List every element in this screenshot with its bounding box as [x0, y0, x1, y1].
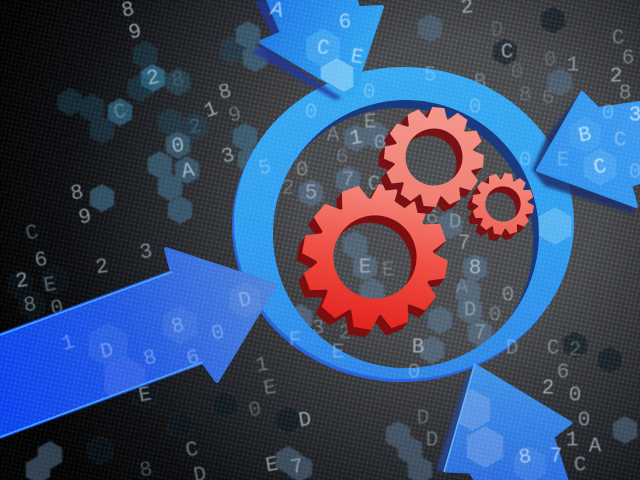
background hex characters: E [137, 384, 153, 408]
background hex characters: 2 [145, 66, 162, 92]
arrow: large from lower left: D [236, 288, 254, 314]
background hex characters: C [112, 100, 129, 126]
arrow: large from lower left: 8 [169, 314, 187, 340]
ring: blue target circle: F [289, 330, 301, 353]
background hex characters: 0 [247, 399, 263, 423]
background hex characters: C [547, 338, 559, 361]
background hex characters: 1 [566, 430, 578, 453]
arrow: right: C [614, 130, 626, 153]
background hex characters: 7 [342, 170, 354, 193]
background hex characters: E [364, 112, 376, 135]
arrow: bottom: 8 [517, 446, 533, 470]
background hex characters: 0 [502, 285, 514, 308]
background hex characters: E [262, 377, 278, 401]
background hex characters: C [368, 174, 380, 197]
background hex characters: 7 [289, 456, 305, 480]
background hex characters: 9 [226, 103, 244, 129]
background hex characters: D [464, 300, 476, 323]
background hex characters: E [382, 260, 394, 283]
background hex characters: 6 [557, 362, 569, 385]
background hex characters: A [589, 436, 602, 459]
background hex characters: 2 [610, 66, 622, 89]
background hex characters: 8 [519, 85, 531, 108]
arrow: right: E [557, 150, 569, 173]
background hex characters: A [456, 277, 469, 300]
background hex characters: E [264, 454, 280, 478]
background hex characters: 8 [216, 80, 234, 106]
background hex characters: 0 [170, 135, 186, 159]
background hex characters: 5 [305, 183, 317, 206]
ring: blue target circle: 0 [305, 102, 317, 125]
ring: blue target circle: 0 [408, 362, 420, 385]
background hex characters: E [42, 274, 58, 298]
ring: blue target circle [228, 65, 574, 387]
background hex characters: 6 [622, 48, 634, 71]
gear: medium salmon [374, 103, 488, 218]
arrow: right [530, 90, 640, 220]
ring: blue target circle: 0 [469, 97, 481, 120]
background hex characters: 0 [49, 297, 65, 321]
background hex characters: 8 [22, 294, 38, 318]
background hex characters: 3 [138, 241, 154, 265]
background hex characters: 2 [282, 178, 294, 201]
background hex characters: 2 [187, 116, 203, 140]
background hex characters: D [297, 409, 313, 433]
background hex characters: 0 [489, 305, 501, 328]
arrow: bottom [436, 360, 580, 480]
background hex characters: 0 [296, 160, 308, 183]
background hex characters: B [474, 72, 486, 95]
background hex characters: D [449, 212, 461, 235]
background hex characters: B [412, 337, 424, 360]
background hex characters: 0 [578, 410, 590, 433]
arrow: right: C [592, 155, 609, 181]
ring: blue target circle: 0 [519, 150, 531, 173]
ring: blue target circle: D [506, 338, 518, 361]
arrow: large from lower left: 0 [209, 321, 227, 347]
background hex characters: 7 [474, 323, 486, 346]
arrow: top: E [349, 46, 365, 70]
background hex characters: 1 [567, 55, 579, 78]
background hex characters: 1 [202, 98, 221, 124]
gear: small salmon [462, 168, 539, 246]
background hex characters: 2 [569, 340, 581, 363]
background hex characters: 6 [426, 208, 438, 231]
arrow: large from lower left: 1 [59, 331, 77, 357]
arrow: top: 6 [338, 11, 352, 35]
background hex characters: D [426, 430, 438, 453]
background hex characters: 9 [77, 205, 94, 231]
ring: blue target circle: 0 [363, 82, 375, 105]
background hex characters: 2 [339, 323, 351, 346]
background hex characters: 1 [348, 127, 364, 151]
arrow: large from lower left: 8 [141, 346, 159, 372]
background hex characters: 8 [619, 83, 631, 106]
background hex characters: 6 [33, 249, 49, 273]
background hex characters: C [501, 42, 513, 65]
background hex characters: 3 [219, 144, 237, 170]
background hex characters: 9 [127, 20, 144, 46]
background hex characters: 1 [254, 354, 270, 378]
arrow: bottom: 7 [550, 446, 562, 469]
background hex characters: 2 [94, 256, 110, 280]
background hex characters: 6 [336, 147, 348, 170]
background hex characters: 7 [458, 233, 470, 256]
ring: blue target circle: 5 [424, 65, 436, 88]
background hex characters: 8 [469, 258, 481, 281]
arrow: top: C [315, 37, 331, 61]
arrow: right: 0 [602, 103, 614, 126]
background hex characters: A [327, 125, 340, 148]
arrow: large from lower left: D [98, 339, 116, 365]
background hex characters: 0 [569, 385, 581, 408]
arrow: right: B [577, 123, 594, 149]
background hex characters: A [180, 160, 197, 184]
arrow: top [250, 0, 390, 100]
background hex characters: E [359, 257, 371, 280]
background hex characters: D [417, 408, 429, 431]
background hex characters: 2 [542, 378, 554, 401]
ring: blue target circle: 5 [257, 157, 273, 181]
background hex characters: C [574, 455, 586, 478]
arrow: large from lower left: 6 [184, 346, 202, 372]
background hex characters: C [24, 221, 41, 247]
ring: blue target circle: E [332, 342, 344, 365]
background hex characters: C [612, 28, 624, 51]
background hex characters: C [184, 439, 200, 463]
background hex characters: D [491, 20, 503, 43]
background hex characters: 8 [69, 181, 86, 207]
background hex characters: 0 [544, 50, 556, 73]
arrow: large from lower left [0, 247, 277, 439]
background hex characters: 0 [374, 133, 386, 156]
background hex characters: 0 [511, 62, 523, 85]
gear: large red [286, 173, 459, 348]
background hex characters: 6 [542, 88, 554, 111]
background hex characters: 8 [170, 68, 187, 94]
background hex characters: 3 [312, 318, 324, 341]
background hex characters: 2 [14, 270, 30, 294]
